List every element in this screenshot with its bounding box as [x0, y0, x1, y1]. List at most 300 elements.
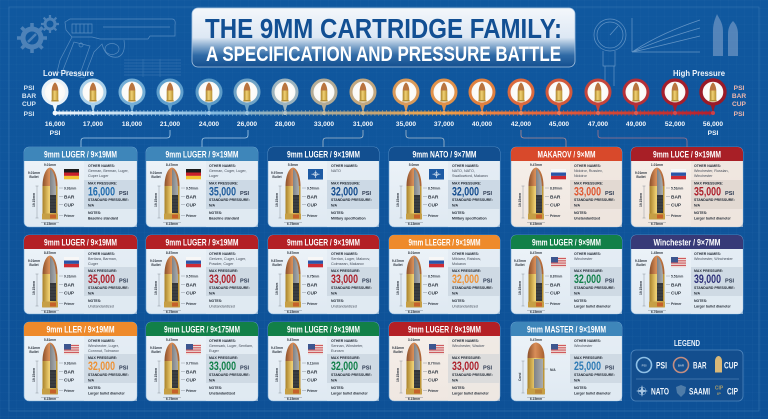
bullet cutaway: 9.47mm [271, 346, 283, 350]
bullet cutaway: 6.15mm [530, 397, 542, 401]
flag [186, 169, 201, 179]
legend: CIP: CIP [727, 386, 738, 396]
specs: Baseline standard [209, 216, 239, 220]
bullet cutaway: 19.15mm [275, 368, 279, 382]
flag [671, 257, 686, 268]
card: row 2 Luger 33,000 [146, 235, 258, 314]
bullet cutaway: 6.15mm [287, 397, 299, 401]
bullet cutaway: 6.75mm [166, 310, 178, 314]
specs: Winchester, Russian, [694, 169, 729, 173]
pressure values: 24,000 [199, 121, 219, 128]
bullet cutaway: 19.15mm [396, 281, 400, 295]
right scale labels [732, 85, 747, 118]
card: 9mm Luger German 35,000 [146, 147, 258, 227]
bullet cutaway: CUP [64, 290, 75, 296]
bullet cutaway: 9.97mm [271, 171, 283, 175]
specs: STANDARD PRESSURE: [452, 373, 493, 377]
specs [694, 164, 735, 220]
bullet cutaway: Bullet [636, 263, 646, 267]
specs: PSI [483, 366, 492, 372]
bullet cutaway [28, 163, 76, 226]
bullet cutaway: 9.91mm [64, 186, 76, 190]
pressure values: PSI [708, 130, 718, 137]
specs: PSI [362, 278, 371, 284]
bullet cutaway: 19.15mm [32, 368, 36, 382]
specs: STANDARD PRESSURE: [331, 198, 372, 202]
specs: 16,000 [88, 186, 115, 198]
specs: Military specification [331, 216, 366, 220]
specs: N/A [331, 378, 338, 382]
pressure values: 40,000 [472, 121, 492, 128]
specs: OTHER NAMES: [452, 252, 479, 256]
specs: 33,000 [209, 361, 236, 373]
bullet cutaway: 6.15mm [166, 222, 178, 226]
header: 9mm NATO / 9×7MM [412, 150, 476, 160]
specs: PSI [483, 278, 492, 284]
specs: OTHER NAMES: [331, 339, 358, 343]
specs: MAX PRESSURE: [209, 356, 238, 360]
card: 9mm Luger German baseline [24, 147, 137, 227]
specs: 35,000 [209, 186, 236, 198]
specs [574, 339, 615, 396]
specs: NOTES: [574, 386, 587, 390]
specs [574, 164, 615, 220]
bullet cutaway: BAR [307, 282, 318, 288]
bullet cutaway: 9.31mm [64, 274, 76, 278]
header: 9mm MASTER / 9×19MM [527, 324, 606, 334]
specs: Larger bullet diameter [694, 216, 731, 220]
bullet cutaway: CUP [428, 378, 439, 384]
bullet cutaway: Bullet [393, 350, 403, 354]
specs: Mokarov [452, 262, 466, 266]
bullet cutaway: 8.87mm [166, 251, 178, 255]
specs: Cuger [88, 262, 99, 266]
specs: PSI [119, 278, 128, 284]
specs: OTHER NAMES: [331, 252, 358, 256]
specs: N/A [452, 204, 458, 208]
pressure values: 33,000 [314, 121, 334, 128]
bullet cutaway: CUP [428, 202, 439, 208]
card: 9mm Luger red [389, 322, 500, 401]
pressure values: 45,000 [549, 121, 569, 128]
bullet cutaway: Primer [671, 214, 682, 218]
specs: Winchester, Winchester [694, 257, 734, 261]
card: row 2 Luger 9x9 [511, 235, 622, 314]
specs: OTHER NAMES: [209, 164, 236, 168]
legend: PSI: PSI [656, 360, 667, 370]
specs [88, 252, 129, 308]
bullet cutaway: 6.75mm [651, 222, 663, 226]
specs: PSI [605, 278, 614, 284]
bullet cutaway: 9.77mm [186, 362, 198, 366]
bullet cutaway: 9.57mm [186, 186, 198, 190]
header: 9mm LUGER / 9×175MM [164, 324, 240, 334]
specs [88, 164, 129, 220]
bullet cutaway: 9.01mm [150, 171, 162, 175]
bullet cutaway [514, 251, 562, 314]
pressure values: 17,000 [83, 121, 103, 128]
specs: Larger bullet diameter [574, 304, 611, 308]
bullet cutaway [635, 251, 683, 314]
bullet cutaway: 9.33mm [635, 259, 647, 263]
specs: NOTES: [88, 386, 101, 390]
specs: NOTES: [331, 386, 344, 390]
specs [452, 339, 493, 396]
bullet cutaway [518, 163, 562, 226]
specs: Larger bullet diameter [331, 392, 368, 396]
specs: STANDARD PRESSURE: [88, 198, 129, 202]
blueprint pistol [57, 19, 181, 78]
specs: NOTES: [88, 299, 101, 303]
bullet cutaway: BAR [64, 282, 75, 288]
specs: Nidoiror, Russiev, [574, 169, 603, 173]
card: Winchester [631, 235, 743, 314]
bullet cutaway: 8.87mm [550, 274, 562, 278]
bullet cutaway: Bullet [29, 350, 39, 354]
specs: Larger bullet diameter [574, 392, 611, 396]
bullet cutaway: 6.75mm [287, 222, 299, 226]
bullet cutaway: 1.45mm [651, 251, 663, 255]
bullet cutaway: BAR [550, 194, 561, 200]
specs: N/A [331, 292, 338, 296]
bullet cutaway: 8.01mm [408, 251, 420, 255]
specs [209, 252, 250, 308]
header: 9mm LUGER / 9×19MM [166, 238, 238, 248]
bullet cutaway: 9.91mm [64, 362, 76, 366]
card: 9mm Master [511, 322, 622, 401]
bullet cutaway: 9.57mm [307, 186, 319, 190]
right scale labels: BAR [732, 93, 746, 100]
specs: NOTES: [694, 299, 707, 303]
bullet cutaway: 6.75mm [307, 274, 319, 278]
bullet cutaway: 9.81mm [392, 346, 404, 350]
specs: OTHER NAMES: [574, 252, 601, 256]
pressure values: 16,000 [45, 121, 65, 128]
specs: MAX PRESSURE: [88, 356, 117, 360]
specs: Military specification [452, 216, 487, 220]
specs: OTHER NAMES: [88, 164, 115, 168]
bullet cutaway: Primer [307, 214, 318, 218]
bullet cutaway [635, 163, 683, 226]
icon: blueprint gears [17, 15, 59, 53]
specs: 32,000 [452, 274, 479, 286]
bullet cutaway: BAR [671, 194, 682, 200]
connectors from timeline to cards [81, 130, 687, 147]
specs: Sennan, Winsbeter, [331, 344, 363, 348]
header: 9mm LUGER / 9×19MM [166, 150, 238, 160]
flag [551, 169, 566, 179]
bullet cutaway: Bullet [272, 350, 282, 354]
header: 9mm LUGER / 9×19MM [287, 238, 360, 248]
bullet cutaway: Primer [550, 214, 561, 218]
pressure values: PSI [50, 130, 60, 137]
header: 9mm LUGER / 9×19MM [408, 324, 481, 334]
specs: NOTES: [331, 211, 344, 215]
bullet cutaway: Bullet [151, 263, 161, 267]
bullet cutaway: Cond [518, 373, 522, 381]
bullet cutaway: 19.15mm [518, 193, 522, 207]
card: 9mm Luger NATO [268, 147, 379, 227]
bullet cutaway: 6.15mm [530, 222, 542, 226]
specs: NOTES: [694, 211, 707, 215]
specs: N/A [452, 292, 458, 296]
specs: Colmsean, Makarov [331, 262, 364, 266]
bullet cutaway: 19.5mm [275, 283, 279, 295]
specs: OTHER NAMES: [574, 164, 601, 168]
pressure values [45, 121, 723, 137]
specs: Unstandardized [452, 304, 478, 308]
specs: MAX PRESSURE: [331, 269, 360, 273]
bullet cutaway [28, 251, 76, 314]
card: row 2 Luger Malorov [268, 235, 379, 314]
bullet cutaway: 6.15mm [408, 397, 420, 401]
header: MAKAROV / 9×MM [538, 150, 596, 160]
specs: NATO [331, 169, 341, 173]
bullet cutaway: 5.5mm [288, 163, 298, 167]
specs: STANDARD PRESSURE: [452, 198, 493, 202]
bullet cutaway: 6.15mm [44, 310, 56, 314]
pressure values: 52,000 [665, 121, 685, 128]
right scale labels: PSI [734, 85, 744, 92]
specs: PSI [605, 366, 614, 372]
pressure values: 47,000 [588, 121, 608, 128]
specs: 32,000 [88, 361, 115, 373]
bullet cutaway: 9.51mm [150, 346, 162, 350]
specs: MAX PRESSURE: [331, 356, 360, 360]
specs: PSI [240, 366, 249, 372]
specs: German, Cuger, Luger, [209, 169, 247, 173]
legend: CIP: IP [717, 391, 721, 396]
specs: N/A [88, 292, 94, 296]
flag [186, 257, 201, 267]
pressure values: 18,000 [122, 121, 142, 128]
flag [429, 344, 444, 354]
specs [694, 252, 735, 308]
bullet cutaway: 5.87mm [287, 251, 299, 255]
bullet cutaway: 8.47mm [166, 163, 178, 167]
bullet cutaway: Bullet [29, 175, 39, 179]
specs [209, 164, 250, 220]
pressure values: 37,000 [434, 121, 454, 128]
left scale labels: PSI [24, 85, 34, 92]
specs: Swallowtord, Makarov [452, 174, 488, 178]
specs [209, 339, 253, 396]
specs: N/A [209, 378, 216, 382]
bullet cutaway: CUP [671, 290, 682, 296]
specs: NOTES: [574, 211, 587, 215]
flag [551, 344, 566, 354]
bullet cutaway [150, 163, 198, 226]
bullet cutaway: CUP [307, 378, 318, 384]
specs: MAX PRESSURE: [452, 182, 481, 186]
bullet cutaway: Bullet [29, 263, 39, 267]
bullet cutaway: 9.47mm [392, 259, 404, 263]
bullet cutaway [150, 251, 198, 314]
bullet cutaway: BAR [186, 194, 197, 200]
bullet cutaway: Primer [428, 389, 439, 393]
bullet cutaway: 9.01mm [635, 171, 647, 175]
legend: CUP: CUP [724, 360, 738, 370]
specs: German, Berman, Luger, [88, 169, 129, 173]
specs: N/A [88, 378, 94, 382]
bullet cutaway: 1.01mm [651, 163, 663, 167]
title banner: A SPECIFICATION AND PRESSURE BATTLE [206, 43, 561, 66]
specs: STANDARD PRESSURE: [88, 286, 129, 290]
bullet cutaway: CUP [64, 202, 75, 208]
bullet cutaway: Bullet [515, 263, 525, 267]
bullet cutaway: 19.15mm [396, 193, 400, 207]
bullet cutaway: 5.51mm [671, 274, 683, 278]
bullet cutaway [396, 163, 440, 226]
legend box [631, 350, 743, 401]
specs: MAX PRESSURE: [574, 269, 603, 273]
specs: OTHER NAMES: [209, 339, 236, 343]
specs: Germsark, Luger, Sentlam, [209, 344, 253, 348]
header: 9mm LLER / 9×19MM [46, 324, 114, 334]
specs: Luger [209, 174, 219, 178]
bullet cutaway: CUP [307, 290, 318, 296]
bullet cutaway: 19.15mm [639, 281, 643, 295]
heading: high pressure: High Pressure [673, 69, 726, 78]
pressure values: 31,000 [353, 121, 373, 128]
bullet cutaway: CUP [428, 290, 439, 296]
flag [186, 344, 201, 354]
bullet cutaway: 19.15mm [154, 281, 158, 295]
bullet cutaway: 5.0mm [409, 163, 419, 167]
legend: CIP: CIP [715, 386, 724, 392]
specs: Unstandardized [574, 216, 600, 220]
specs: MAX PRESSURE: [452, 356, 481, 360]
bullet cutaway: 9.01mm [150, 259, 162, 263]
pressure values: 42,000 [511, 121, 531, 128]
specs: Nidoiror [574, 174, 588, 178]
specs: Larger bullet diameter [88, 392, 125, 396]
bullet cutaway: N/A [550, 368, 556, 372]
specs: OTHER NAMES: [452, 339, 479, 343]
specs: STANDARD PRESSURE: [88, 373, 129, 377]
left scale labels: CUP [22, 101, 37, 108]
bullet cutaway: 3.01mm [408, 338, 420, 342]
bullet cutaway: 9.01mm [44, 163, 56, 167]
flag [64, 169, 79, 179]
card: 9mm NATO [389, 147, 500, 227]
specs: NOTES: [452, 386, 465, 390]
bullet cutaway: CUP [307, 202, 318, 208]
legend: SAAMI: SAAMI [689, 386, 710, 396]
bullet cutaway: 5.87mm [287, 338, 299, 342]
bullet cutaway: CUP [186, 202, 197, 208]
left scale labels: BAR [22, 93, 36, 100]
specs: N/A [88, 204, 94, 208]
specs: PSI [725, 278, 734, 284]
specs: MAX PRESSURE: [452, 269, 481, 273]
specs: Winchester, Wacker [452, 344, 485, 348]
card: 9mm Luce [631, 147, 743, 227]
specs: NOTES: [452, 211, 465, 215]
bullet cutaway: 8.57mm [428, 274, 440, 278]
bullet cutaway: Bullet [151, 350, 161, 354]
bullet cutaway: CUP [671, 202, 682, 208]
legend: BAR: BAR [678, 364, 685, 368]
bullet cutaway: Primer [186, 302, 197, 306]
bullet cutaway: 9.57mm [186, 274, 198, 278]
bullet cutaway: 19.15mm [518, 281, 522, 295]
specs: MAX PRESSURE: [88, 269, 117, 273]
specs: Winsheoter, Luger, [88, 344, 119, 348]
specs: Cuper Luger [88, 174, 109, 178]
specs: N/A [694, 204, 700, 208]
specs: Powder, Cuger [209, 262, 234, 266]
bullet cutaway: 19.15mm [32, 193, 36, 207]
specs: MAX PRESSURE: [88, 182, 117, 186]
flag [551, 257, 566, 268]
specs: N/A [209, 204, 216, 208]
pressure values: 28,000 [275, 121, 295, 128]
header: 9mm LUGER / 9×19MM [44, 150, 117, 160]
bullet cutaway: 8.87mm [550, 186, 562, 190]
bullet cutaway: 6.15mm [44, 222, 56, 226]
specs: PSI [119, 366, 128, 372]
legend: CIP [715, 386, 738, 396]
specs [331, 252, 372, 308]
specs: Eurosm [331, 349, 344, 353]
bullet cutaway: 19.15mm [32, 281, 36, 295]
specs: Winchester [574, 344, 593, 348]
pressure timeline bar [55, 112, 713, 114]
bullet cutaway: 6.75mm [166, 397, 178, 401]
specs: OTHER NAMES: [452, 164, 479, 168]
specs: 25,000 [574, 361, 601, 373]
bullet cutaway [271, 251, 319, 314]
specs: 32,000 [331, 361, 358, 373]
bullet cutaway [392, 338, 440, 401]
bullet cutaway: Primer [671, 302, 682, 306]
bullet cutaway [392, 251, 440, 314]
bullet cutaway: Primer [428, 214, 439, 218]
specs: 32,000 [574, 274, 601, 286]
legend: PSI: PSI [642, 364, 647, 368]
specs: STANDARD PRESSURE: [209, 286, 250, 290]
bullet cutaway: 19.15mm [154, 368, 158, 382]
specs: Bertiara, Barman, [88, 257, 117, 261]
bullet cutaway: Primer [550, 302, 561, 306]
specs: MAX PRESSURE: [694, 182, 723, 186]
specs: Unstandardized [209, 304, 235, 308]
specs: STANDARD PRESSURE: [574, 286, 615, 290]
specs: STANDARD PRESSURE: [209, 198, 250, 202]
bullet cutaway: 6.15mm [408, 310, 420, 314]
bullet cutaway: 5.47mm [530, 338, 542, 342]
flag [308, 169, 323, 180]
legend: BAR: BAR [693, 360, 707, 370]
specs [88, 339, 129, 396]
bullet cutaway: Primer [428, 302, 439, 306]
pressure values: 35,000 [396, 121, 416, 128]
specs: NATO, NATO, [452, 169, 475, 173]
bullet cutaway: BAR [307, 370, 318, 376]
bullet cutaway: CUP [186, 290, 197, 296]
bullet cutaway [518, 338, 556, 401]
bullet cutaway: Primer [64, 214, 75, 218]
specs: PSI [605, 191, 614, 197]
specs: STANDARD PRESSURE: [574, 373, 615, 377]
specs: 33,000 [574, 186, 601, 198]
specs: 33,000 [209, 274, 236, 286]
bullet cutaway: 5.47mm [166, 338, 178, 342]
header: 9mm LUGER / 9×19MM [44, 238, 117, 248]
specs: OTHER NAMES: [694, 252, 721, 256]
specs: STANDARD PRESSURE: [574, 198, 615, 202]
